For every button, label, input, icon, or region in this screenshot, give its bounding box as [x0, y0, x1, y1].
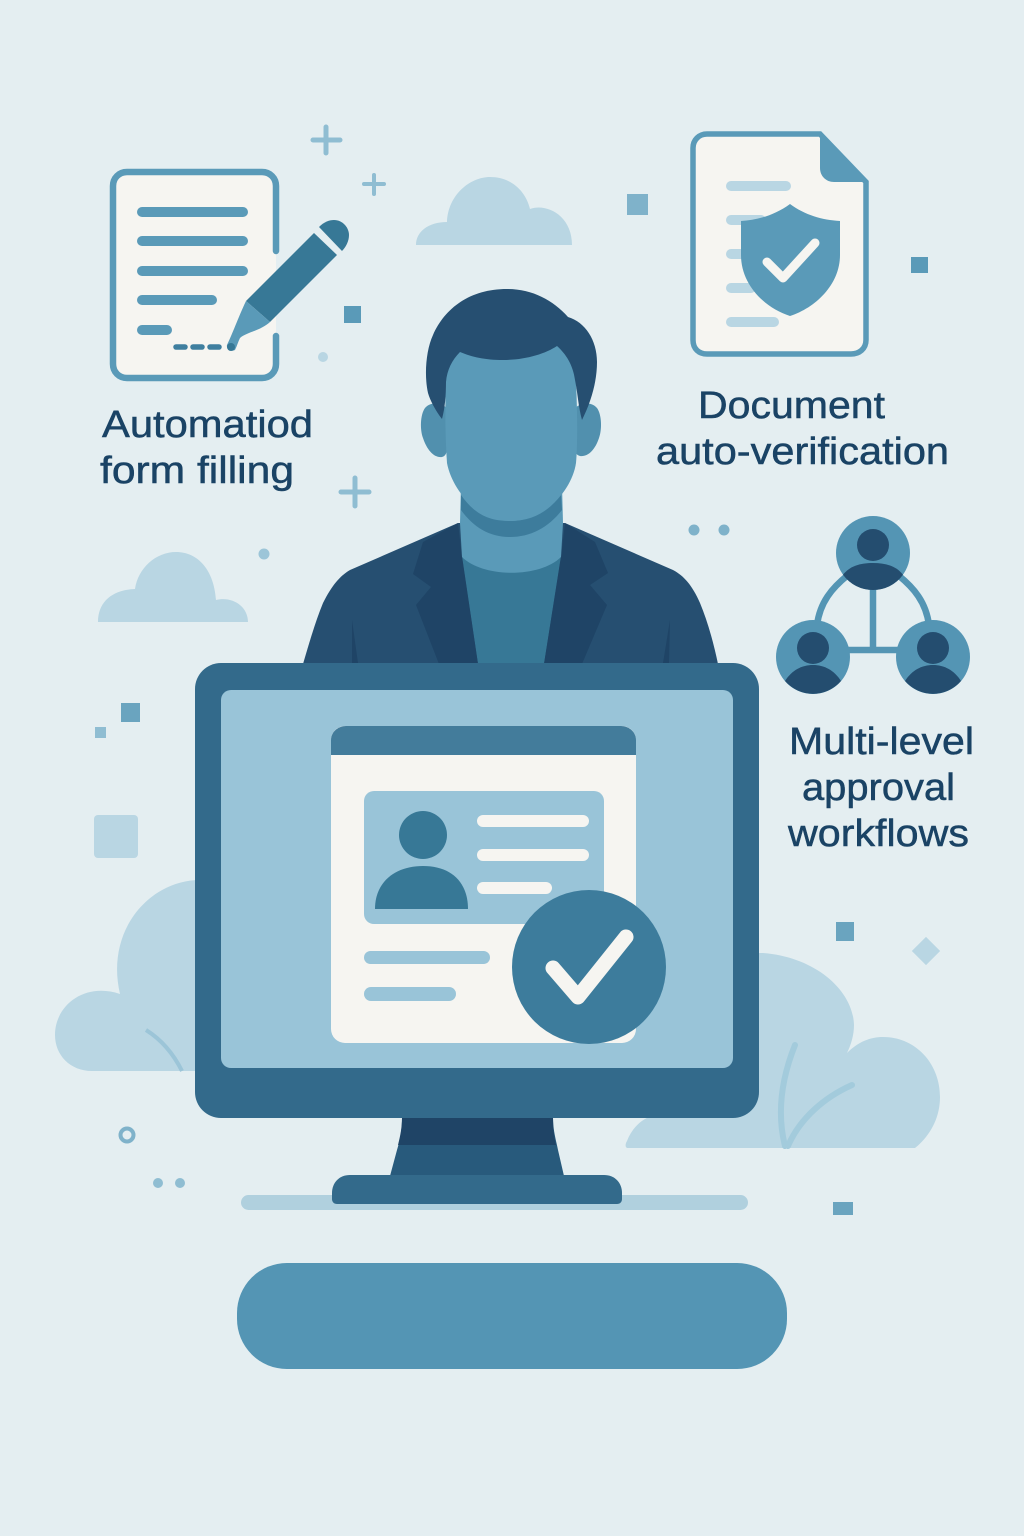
person [303, 289, 718, 664]
jacket creases [352, 620, 670, 663]
lapels [413, 523, 608, 664]
decorative sparkles and squares [94, 127, 940, 1215]
text: document auto-verification [656, 385, 949, 473]
text: automated form filling: form filling [100, 450, 294, 492]
icon: document with shield [693, 134, 866, 354]
text: document auto-verification: auto-verification [656, 431, 949, 473]
check badge [512, 890, 666, 1044]
frame [195, 663, 759, 1118]
text: multi-level approval workflows: Multi-level [789, 721, 974, 763]
icon: form with pen [113, 172, 349, 378]
text: multi-level approval workflows: approval [802, 767, 955, 809]
form lines [364, 951, 490, 964]
decorative bush: lower right [626, 953, 940, 1148]
window [331, 726, 636, 1043]
desk line [241, 1195, 748, 1210]
decorative bush: lower left [55, 880, 200, 1071]
decorative cloud: left middle [98, 552, 248, 622]
text: automated form filling: Automatiod [102, 404, 313, 446]
text: document auto-verification: Document [698, 385, 885, 427]
text: multi-level approval workflows: workflows [787, 813, 969, 855]
ears [421, 404, 447, 457]
shirt [462, 556, 561, 664]
stand base [332, 1175, 622, 1204]
decorative cloud: top centre [416, 177, 572, 245]
face [445, 340, 577, 521]
icon: approval network [776, 516, 970, 694]
stand [390, 1118, 564, 1176]
monitor [195, 663, 759, 1210]
jacket [303, 523, 718, 664]
empty button pill [237, 1263, 787, 1369]
screen [221, 690, 733, 1068]
hair [426, 289, 597, 420]
neck [460, 485, 563, 573]
text: automated form filling [100, 404, 313, 492]
text: multi-level approval workflows [787, 721, 974, 855]
id card [364, 791, 604, 924]
neck shadow [461, 495, 562, 537]
